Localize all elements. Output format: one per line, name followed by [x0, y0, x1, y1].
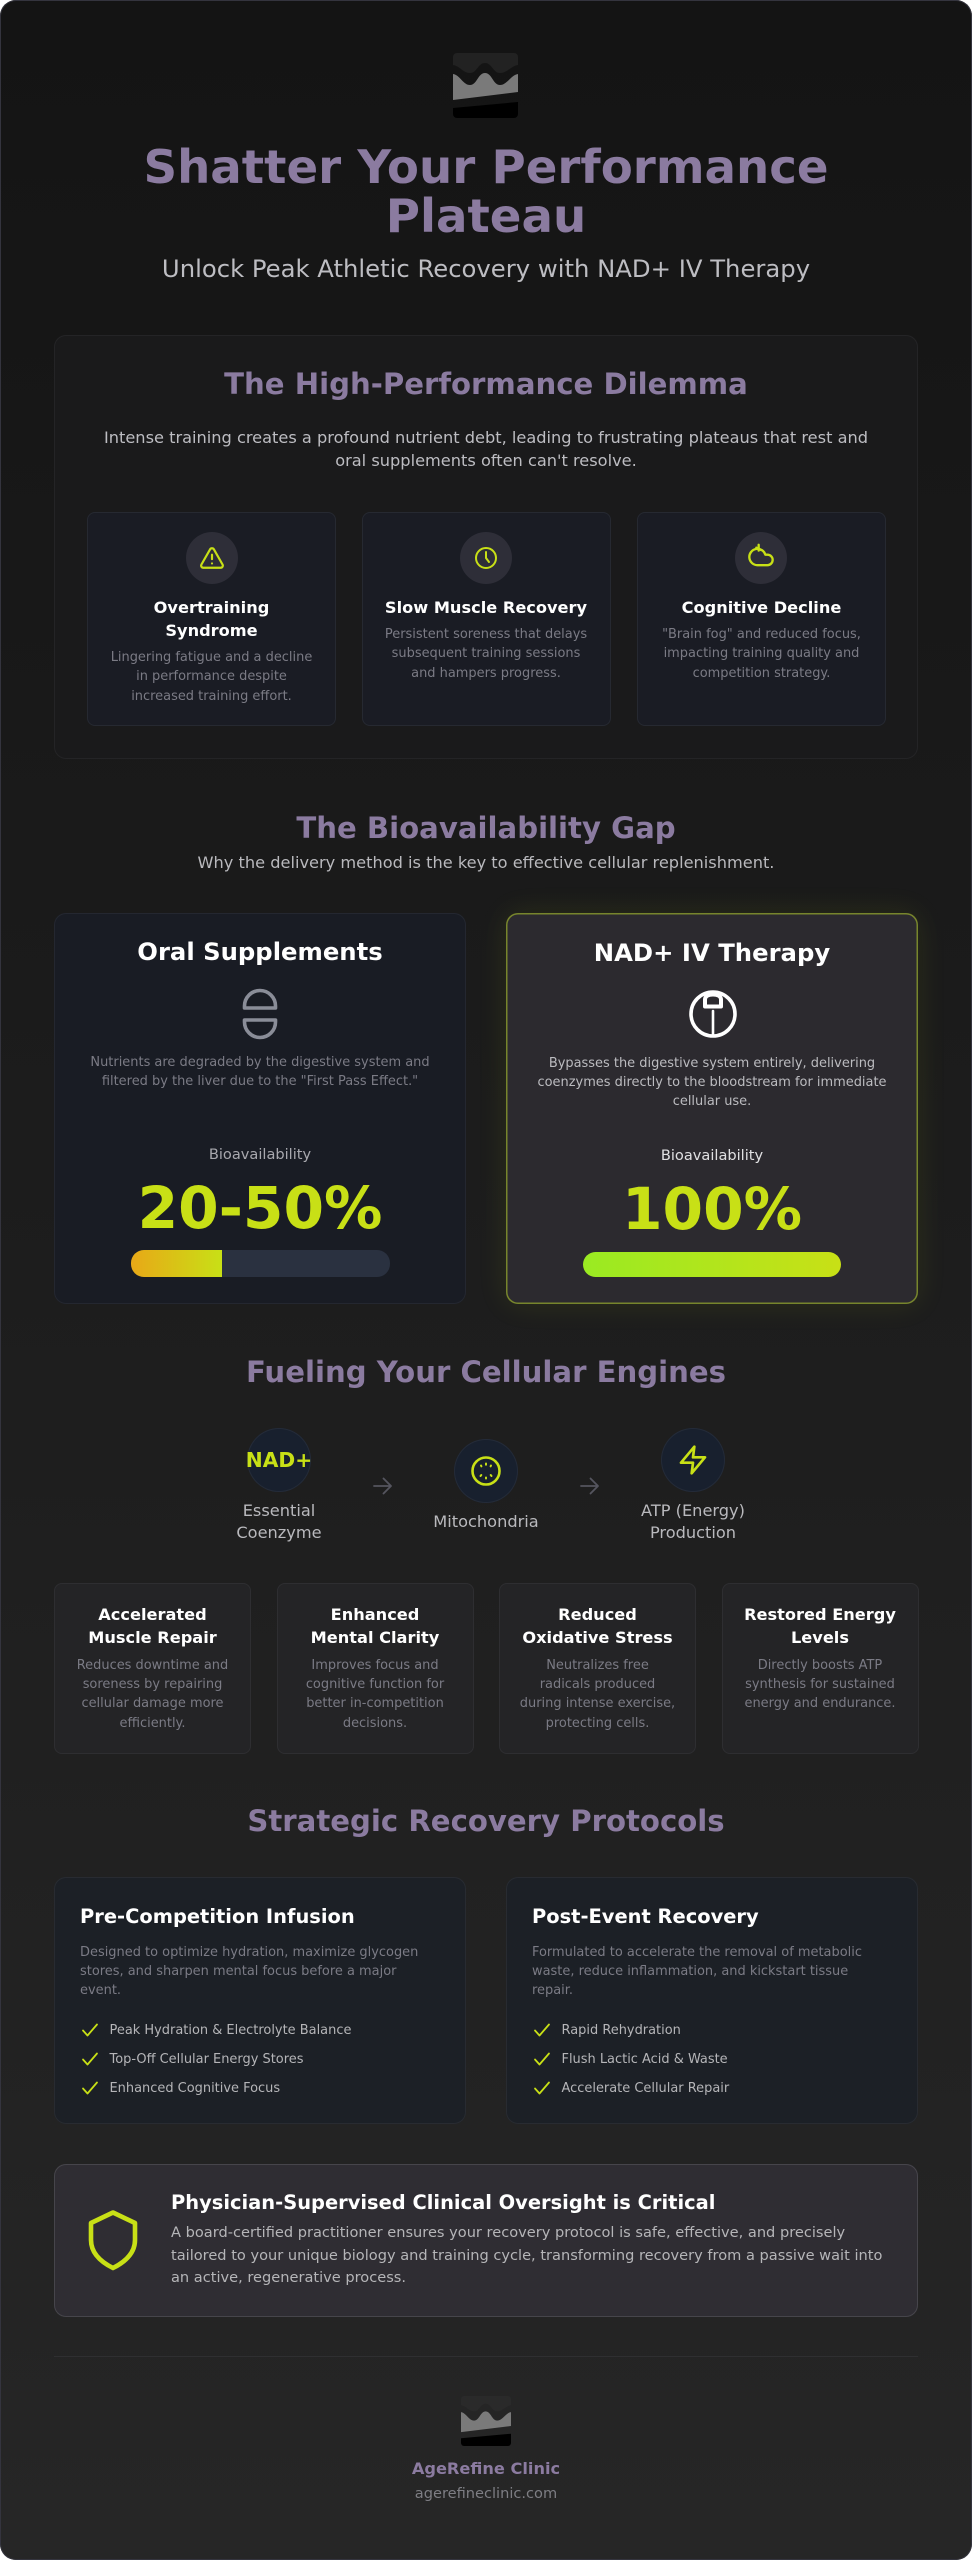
icon: split pill: [242, 988, 278, 1040]
icon: brain fog cloud: [734, 532, 786, 584]
card text: "Brain fog" and reduced focus,: [662, 627, 861, 642]
icon: shield: [88, 2210, 138, 2270]
benefit title: [744, 1605, 896, 1647]
heading: recovery protocols: Strategic Recovery Protocols: [247, 1804, 725, 1838]
check item: Peak Hydration & Electrolyte Balance: [110, 2023, 351, 2038]
callout: physician oversight: [54, 2164, 918, 2317]
benefit title: [522, 1605, 673, 1647]
title: Shatter Your Performance: [143, 141, 829, 195]
protocol card: pre-competition: [54, 1877, 466, 2124]
benefit text: Improves focus and: [311, 1658, 439, 1672]
card title: Syndrome: [165, 621, 258, 640]
callout text: an active, regenerative process.: [171, 2269, 406, 2286]
benefit title: Restored Energy: [744, 1605, 896, 1624]
card: overtraining syndrome: [87, 512, 336, 726]
card text: [662, 627, 861, 681]
protocol text: Formulated to accelerate the removal of metabolic: [532, 1944, 862, 1960]
panel title: Oral Supplements: [137, 937, 383, 966]
benefit title: Levels: [791, 1628, 849, 1647]
intro text: Intense training creates a profound nutrient debt, leading to frustrating plateaus that rest and: [104, 428, 868, 447]
step label: ATP (Energy): [641, 1500, 745, 1520]
card text: Persistent soreness that delays: [385, 627, 587, 642]
benefit text: [306, 1658, 444, 1731]
description: [90, 1054, 430, 1089]
card: cognitive decline: [637, 512, 886, 726]
benefit text: radicals produced: [540, 1677, 655, 1692]
step label: [641, 1500, 745, 1542]
benefit text: [520, 1658, 675, 1731]
card title: Cognitive Decline: [682, 598, 841, 617]
step label: Coenzyme: [236, 1523, 322, 1542]
card text: increased training effort.: [131, 689, 292, 704]
check item: Top-Off Cellular Energy Stores: [110, 2052, 303, 2067]
icon: clock: [460, 532, 512, 584]
benefit title: [311, 1605, 439, 1647]
benefit title: Enhanced: [331, 1605, 419, 1624]
benefit card: mental clarity: [276, 1583, 474, 1754]
benefit text: Neutralizes free: [546, 1658, 649, 1672]
description: cellular use.: [673, 1094, 751, 1109]
benefit text: during intense exercise,: [520, 1696, 675, 1711]
footer clinic name: AgeRefine Clinic: [412, 2459, 560, 2478]
footer url: agerefineclinic.com: [415, 2485, 557, 2502]
benefit card: oxidative stress: [499, 1583, 696, 1754]
heading: dilemma: The High-Performance Dilemma: [224, 366, 748, 400]
bar: IV bioavailability: [583, 1252, 841, 1277]
flow step: mitochondria: [433, 1439, 539, 1531]
flow step: NAD+: [236, 1428, 322, 1542]
benefit title: Oxidative Stress: [522, 1628, 673, 1647]
arrow: [580, 1478, 599, 1494]
protocol text: Designed to optimize hydration, maximize glycogen: [80, 1944, 418, 1960]
callout text: [171, 2224, 882, 2286]
stat: 100%: 100%: [622, 1175, 802, 1243]
description: coenzymes directly to the bloodstream for immediate: [538, 1075, 886, 1090]
panel title: NAD+ IV Therapy: [594, 938, 830, 967]
flow step: ATP: [641, 1428, 745, 1542]
bioavailability label: Bioavailability: [209, 1146, 311, 1162]
section subtitle: Why the delivery method is the key to effective cellular replenishment.: [198, 853, 774, 872]
benefit text: Directly boosts ATP: [758, 1658, 882, 1672]
protocol text: stores, and sharpen mental focus before a major: [80, 1964, 396, 1979]
protocol text: [80, 1944, 418, 1998]
step label: Essential: [243, 1500, 315, 1520]
footer logo: [461, 2411, 511, 2446]
icon: warning triangle: [186, 532, 238, 584]
node: bolt icon: [661, 1428, 725, 1492]
card title: [154, 598, 269, 640]
card text: subsequent training sessions: [392, 646, 580, 661]
protocol card: post-event: [506, 1877, 918, 2124]
benefit text: synthesis for sustained: [745, 1677, 895, 1692]
protocol text: waste, reduce inflammation, and kickstart tissue: [532, 1964, 848, 1979]
panel: high-performance dilemma: [54, 335, 918, 759]
description: Nutrients are degraded by the digestive system and: [90, 1054, 430, 1070]
check item: Rapid Rehydration: [562, 2023, 681, 2038]
description: Bypasses the digestive system entirely, delivering: [549, 1056, 875, 1070]
benefit title: Accelerated: [98, 1605, 207, 1624]
benefit title: Mental Clarity: [311, 1628, 439, 1647]
icon: IV drip circle: [689, 990, 737, 1038]
benefit text: [77, 1658, 228, 1731]
callout text: tailored to your unique biology and training cycle, transforming recovery from a passive wait into: [171, 2247, 882, 2264]
title: [143, 141, 829, 244]
callout text: A board-certified practitioner ensures your recovery protocol is safe, effective, and precisely: [171, 2224, 845, 2241]
subtitle: Unlock Peak Athletic Recovery with NAD+ IV Therapy: [162, 254, 810, 282]
benefit card: muscle repair: [54, 1583, 251, 1754]
benefit text: better in-competition: [306, 1696, 444, 1711]
benefit text: Reduces downtime and: [77, 1658, 228, 1672]
node: NAD+: [247, 1428, 311, 1492]
description: [538, 1056, 886, 1109]
heading: cellular engines: Fueling Your Cellular Engines: [246, 1355, 726, 1389]
panel: NAD+ IV therapy: [506, 913, 918, 1304]
step label: Mitochondria: [433, 1512, 539, 1531]
stat: 20-50%: 20-50%: [138, 1174, 382, 1242]
card text: and hampers progress.: [411, 666, 561, 681]
benefit text: cognitive function for: [306, 1677, 444, 1692]
card: slow muscle recovery: [362, 512, 610, 726]
description: filtered by the liver due to the "First Pass Effect.": [102, 1074, 418, 1089]
benefit text: soreness by repairing: [83, 1677, 222, 1692]
benefit text: [744, 1658, 896, 1711]
benefit title: Muscle Repair: [88, 1628, 217, 1647]
step label: [236, 1500, 322, 1542]
bioavailability label: Bioavailability: [661, 1146, 763, 1164]
benefit text: protecting cells.: [546, 1716, 649, 1731]
card text: in performance despite: [136, 669, 287, 684]
intro text: [104, 428, 868, 470]
benefit text: efficiently.: [119, 1716, 186, 1731]
card text: impacting training quality and: [664, 646, 859, 661]
protocol text: [532, 1944, 862, 1998]
benefit title: Reduced: [558, 1605, 637, 1624]
card title: Overtraining: [154, 598, 269, 617]
card text: [111, 650, 312, 704]
intro text: oral supplements often can't resolve.: [335, 451, 637, 470]
check item: Flush Lactic Acid & Waste: [562, 2052, 728, 2067]
protocol text: repair.: [532, 1983, 573, 1998]
checklist: [82, 2023, 351, 2096]
benefit title: [88, 1605, 217, 1647]
card text: Lingering fatigue and a decline: [111, 650, 312, 665]
card text: [385, 627, 587, 681]
node: mitochondria icon: [454, 1439, 518, 1503]
card text: competition strategy.: [693, 666, 830, 681]
step label: Production: [650, 1523, 736, 1542]
benefit card: energy levels: [722, 1583, 918, 1754]
heading: bioavailability gap: The Bioavailability Gap: [296, 811, 676, 845]
callout title: Physician-Supervised Clinical Oversight is Critical: [171, 2191, 715, 2214]
check item: Accelerate Cellular Repair: [562, 2081, 729, 2096]
bar: oral bioavailability: [130, 1250, 390, 1276]
header logo: [453, 53, 518, 118]
panel: oral supplements: [54, 913, 466, 1304]
node: NAD+: NAD+: [246, 1448, 312, 1472]
arrow: [373, 1478, 392, 1494]
benefit text: decisions.: [343, 1716, 407, 1731]
protocol text: event.: [80, 1983, 121, 1998]
benefit text: cellular damage more: [81, 1696, 224, 1711]
title: Plateau: [386, 190, 586, 244]
benefit text: energy and endurance.: [744, 1696, 896, 1711]
protocol title: Pre-Competition Infusion: [80, 1904, 355, 1928]
protocol title: Post-Event Recovery: [532, 1904, 759, 1928]
check item: Enhanced Cognitive Focus: [110, 2081, 280, 2096]
checklist: [534, 2023, 730, 2096]
card title: Slow Muscle Recovery: [385, 598, 587, 617]
